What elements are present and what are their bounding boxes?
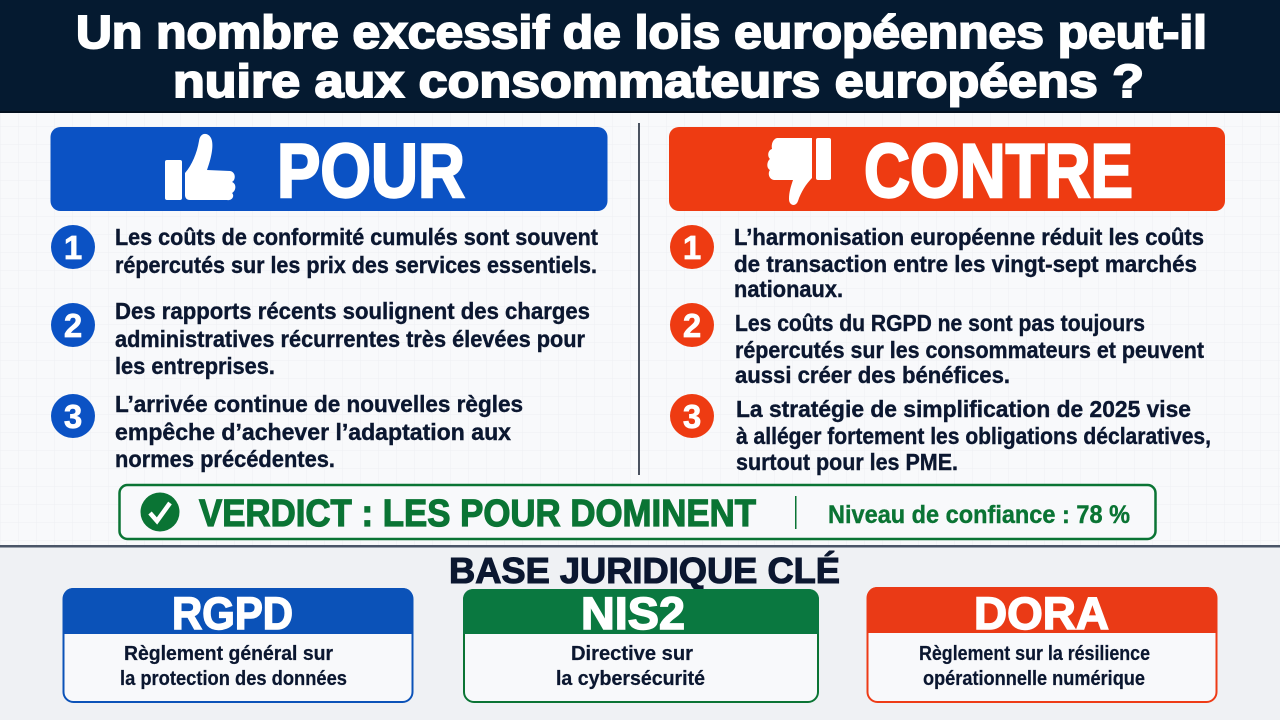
header band with title (0, 0, 1280, 113)
item 3 contre: 3 (683, 398, 701, 435)
banner: contre (669, 127, 1225, 214)
item 3 pour: empêche d’achever l’adaptation aux (115, 419, 511, 445)
item 2 pour: administratives récurrentes très élevées pour (115, 326, 585, 352)
item 1 pour: répercutés sur les prix des services essentiels. (115, 252, 597, 278)
card: RGPD: Règlement général sur (124, 642, 333, 665)
card: DORA: Règlement sur la résilience (919, 642, 1150, 665)
header band with title: Un nombre excessif de lois européennes peut-il (76, 6, 1207, 58)
panel: contre (669, 127, 1225, 475)
icon: thumbs up (165, 134, 235, 200)
item 3 contre (670, 394, 1211, 475)
item 2 pour: Des rapports récents soulignent des charges (115, 298, 590, 324)
item 1 pour: 1 (64, 229, 82, 266)
verdict box: VERDICT : LES POUR DOMINENT (199, 493, 756, 535)
item 3 contre: La stratégie de simplification de 2025 vise (736, 396, 1191, 422)
item 2 contre: aussi créer des bénéfices. (735, 362, 1010, 388)
item 1 contre: L’harmonisation européenne réduit les coûts (734, 224, 1204, 250)
item 2 pour: 2 (64, 307, 82, 344)
heading: base juridique: BASE JURIDIQUE CLÉ (449, 550, 840, 591)
card: RGPD: la protection des données (120, 667, 347, 690)
banner: contre: CONTRE (864, 129, 1133, 214)
item 3 pour: 3 (64, 398, 82, 435)
icon: check (140, 492, 180, 532)
icon: thumbs down (767, 138, 831, 205)
item 3 pour: L’arrivée continue de nouvelles règles (115, 391, 523, 417)
item 2 pour: les entreprises. (115, 353, 275, 379)
card: DORA: DORA (974, 588, 1109, 639)
item 1 contre: nationaux. (734, 276, 843, 302)
card: NIS2: NIS2 (581, 588, 685, 639)
verdict box: Niveau de confiance : 78 % (828, 501, 1130, 529)
banner: pour: POUR (277, 129, 465, 214)
item 1 contre: 1 (683, 229, 701, 266)
banner: pour (50, 127, 608, 214)
item 3 pour (51, 391, 523, 472)
item 3 pour: normes précédentes. (115, 446, 335, 472)
verdict box (120, 485, 1156, 539)
item 2 contre: répercutés sur les consommateurs et peuvent (735, 337, 1204, 363)
card: RGPD (63, 588, 413, 702)
panel: base juridique (0, 545, 1280, 720)
item 3 contre: à alléger fortement les obligations déclaratives, (736, 423, 1211, 449)
card: DORA: opérationnelle numérique (923, 667, 1145, 690)
card: NIS2 (463, 588, 819, 702)
card: NIS2: la cybersécurité (556, 667, 705, 690)
card: RGPD: RGPD (172, 588, 293, 639)
item 3 contre: surtout pour les PME. (736, 449, 958, 475)
item 2 contre (670, 303, 1204, 388)
card: NIS2: Directive sur (571, 642, 693, 665)
header band with title: nuire aux consommateurs européens ? (173, 55, 1144, 107)
card: DORA (867, 587, 1217, 702)
item 2 contre: Les coûts du RGPD ne sont pas toujours (735, 310, 1145, 336)
item 1 contre (670, 224, 1204, 302)
item 2 pour (51, 298, 590, 379)
item 1 contre: de transaction entre les vingt-sept marchés (734, 251, 1197, 277)
item 1 pour (51, 224, 598, 278)
item 1 pour: Les coûts de conformité cumulés sont souvent (115, 224, 598, 250)
panel: pour (50, 127, 608, 472)
item 2 contre: 2 (683, 307, 701, 344)
